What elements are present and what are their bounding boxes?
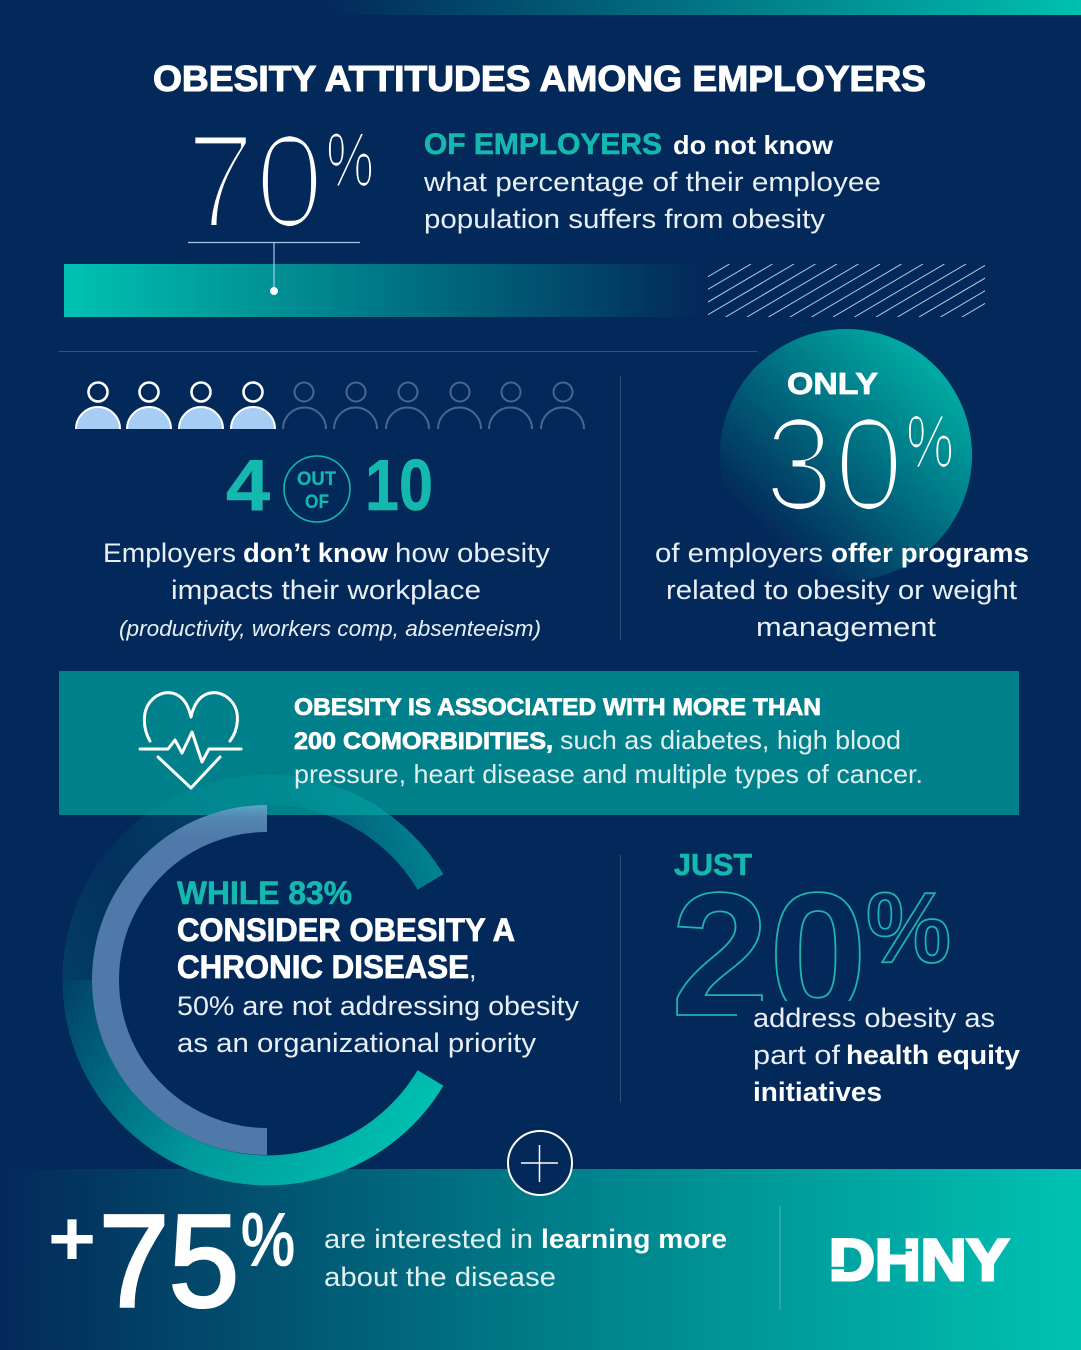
4 out of 10 description: Employers xyxy=(103,538,236,568)
4 out of 10 figure: OF xyxy=(305,492,329,513)
20 percent description xyxy=(753,1003,1020,1107)
just label: JUST xyxy=(674,847,752,882)
panel: 83 percent text: CONSIDER OBESITY A xyxy=(177,912,515,948)
4 out of 10 description: how obesity xyxy=(395,538,551,568)
outlined number 20%: % xyxy=(866,872,951,984)
panel: 83 percent text: as an organizational priority xyxy=(177,1028,537,1058)
70 percent description: do not know xyxy=(673,130,834,160)
progress bar xyxy=(64,264,700,317)
75 percent description: are interested in xyxy=(324,1224,533,1254)
70 percent description: OF EMPLOYERS xyxy=(424,128,662,161)
outlined number 20% xyxy=(676,891,950,1016)
panel: 83 percent text xyxy=(177,875,580,1058)
70 percent description: what percentage of their employee xyxy=(423,167,881,197)
30 percent description: offer programs xyxy=(831,538,1029,568)
comorbidities text: OBESITY IS ASSOCIATED WITH MORE THAN xyxy=(294,694,821,721)
4 out of 10 figure: 10 xyxy=(365,446,433,526)
big number +75%: + xyxy=(48,1194,96,1282)
big number 70%: 70 xyxy=(186,108,324,256)
comorbidities text: pressure, heart disease and multiple types of cancer. xyxy=(294,759,923,789)
comorbidities text xyxy=(294,694,923,789)
panel: 75 percent stat xyxy=(48,1187,727,1334)
only label: ONLY xyxy=(787,366,878,401)
panel: 70 percent stat xyxy=(64,133,985,317)
panel: only 30 percent xyxy=(655,329,1029,642)
4 out of 10 description: don’t know xyxy=(243,538,389,568)
big number +75%: % xyxy=(241,1198,295,1281)
75 percent description: about the disease xyxy=(324,1262,556,1292)
4 out of 10 figure: OUT xyxy=(297,469,336,490)
big number +75%: 75 xyxy=(99,1187,239,1334)
comorbidities text: such as diabetes, high blood xyxy=(560,725,901,755)
gradient circle xyxy=(720,329,972,581)
people icons xyxy=(76,382,584,429)
70 percent description xyxy=(423,128,881,234)
20 percent description: health equity xyxy=(846,1040,1020,1070)
4 out of 10 figure xyxy=(226,446,433,526)
4 out of 10 description: (productivity, workers comp, absenteeism) xyxy=(119,616,541,641)
icon: plus circle xyxy=(508,1131,572,1195)
chart: 83 percent ring xyxy=(77,790,430,1170)
panel: comorbidities band xyxy=(59,671,1019,815)
30 percent description: related to obesity or weight xyxy=(666,575,1018,605)
panel: 83 percent text: , xyxy=(469,954,477,984)
4 out of 10 description xyxy=(103,538,551,641)
big number 30%: % xyxy=(906,400,954,483)
20 percent description: part of xyxy=(753,1040,841,1070)
20 percent description: initiatives xyxy=(753,1077,882,1107)
panel: 83 percent text: CHRONIC DISEASE xyxy=(177,949,469,985)
logo: DHNY: DHNY xyxy=(829,1228,1009,1293)
30 percent description: management xyxy=(756,612,937,642)
big number +75% xyxy=(48,1187,295,1334)
big number 30%: 30 xyxy=(764,391,904,539)
hatched remainder of bar xyxy=(708,264,985,317)
4 out of 10 description: impacts their workplace xyxy=(171,575,481,605)
comorbidities text: 200 COMORBIDITIES, xyxy=(294,728,553,755)
75 percent description: learning more xyxy=(541,1224,727,1254)
panel: just 20 percent xyxy=(671,847,1020,1107)
20 percent description: address obesity as xyxy=(753,1003,995,1033)
30 percent description xyxy=(655,538,1029,642)
4 out of 10 figure: 4 xyxy=(226,446,270,526)
title: OBESITY ATTITUDES AMONG EMPLOYERS xyxy=(153,58,926,99)
panel: 4 out of 10 xyxy=(76,382,584,641)
outlined number 20%: 20 xyxy=(671,857,867,1053)
panel: 83 percent text: WHILE 83% xyxy=(177,875,352,911)
70 percent description: population suffers from obesity xyxy=(424,204,826,234)
top gradient bar xyxy=(0,0,1081,15)
75 percent description xyxy=(324,1224,727,1292)
icon: heart with pulse xyxy=(140,693,241,788)
big number 70%: % xyxy=(326,118,374,203)
30 percent description: of employers xyxy=(655,538,823,568)
panel: bottom call-to-action band xyxy=(0,1169,1081,1350)
leader line and dot xyxy=(188,242,360,295)
panel: 83 percent text: 50% are not addressing obesity xyxy=(177,991,580,1021)
